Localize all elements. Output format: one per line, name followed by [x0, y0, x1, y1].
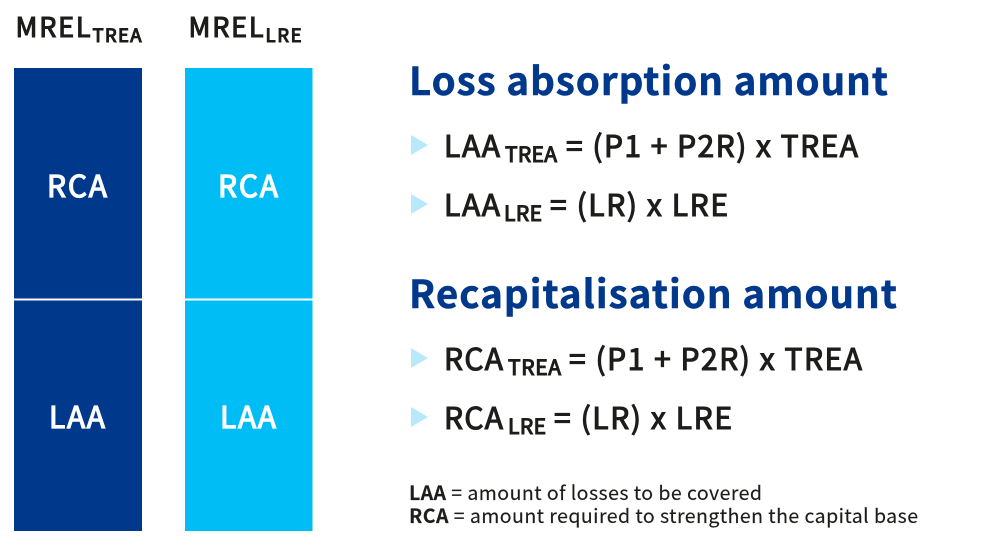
formula: LAA TREA: = (P1 + P2R) x TREA	[566, 122, 859, 166]
icon: bullet arrow	[411, 194, 428, 214]
stacked bar: MREL TREA	[14, 68, 142, 531]
icon: bullet arrow	[411, 407, 428, 427]
formula: RCA TREA: = (P1 + P2R) x TREA	[569, 335, 863, 379]
stacked bar: MREL LRE	[185, 68, 312, 531]
formula: RCA LRE	[444, 394, 732, 441]
stacked bar: MREL LRE: RCA	[218, 162, 279, 206]
formula: RCA LRE: = (LR) x LRE	[554, 394, 732, 438]
formula: RCA LRE: LRE	[508, 411, 546, 441]
formula: RCA TREA	[444, 335, 863, 382]
heading: loss absorption amount: Loss absorption amount	[409, 51, 888, 107]
column label: MREL LRE	[188, 6, 302, 48]
column label: MREL LRE: LRE	[266, 22, 302, 48]
icon: bullet arrow	[411, 348, 428, 368]
formula: LAA LRE: LRE	[504, 198, 542, 228]
stacked bar: MREL TREA: LAA	[49, 393, 106, 437]
stacked bar: MREL LRE: LAA	[220, 393, 277, 437]
column label: MREL TREA	[16, 6, 142, 48]
formula: LAA TREA: LAA	[444, 122, 501, 166]
stacked bar: MREL TREA: RCA	[47, 162, 108, 206]
formula: RCA LRE: RCA	[444, 394, 504, 438]
formula: LAA LRE: = (LR) x LRE	[550, 181, 728, 225]
formula: RCA TREA: TREA	[508, 352, 561, 382]
legend note: RCA = amount required to strengthen the capital base	[409, 500, 918, 529]
formula: LAA TREA	[444, 122, 859, 169]
icon: bullet arrow	[411, 135, 428, 155]
formula: LAA TREA: TREA	[505, 139, 557, 169]
legend note: LAA = amount of losses to be covered	[409, 477, 762, 506]
formula: LAA LRE: LAA	[444, 181, 501, 225]
formula: RCA TREA: RCA	[444, 335, 504, 379]
column label: MREL TREA: TREA	[92, 22, 142, 48]
column label: MREL TREA: MREL	[16, 6, 90, 45]
column label: MREL LRE: MREL	[188, 6, 264, 45]
formula: LAA LRE	[444, 181, 728, 228]
legend note	[409, 477, 918, 529]
heading: recapitalisation amount: Recapitalisation amount	[409, 264, 897, 320]
